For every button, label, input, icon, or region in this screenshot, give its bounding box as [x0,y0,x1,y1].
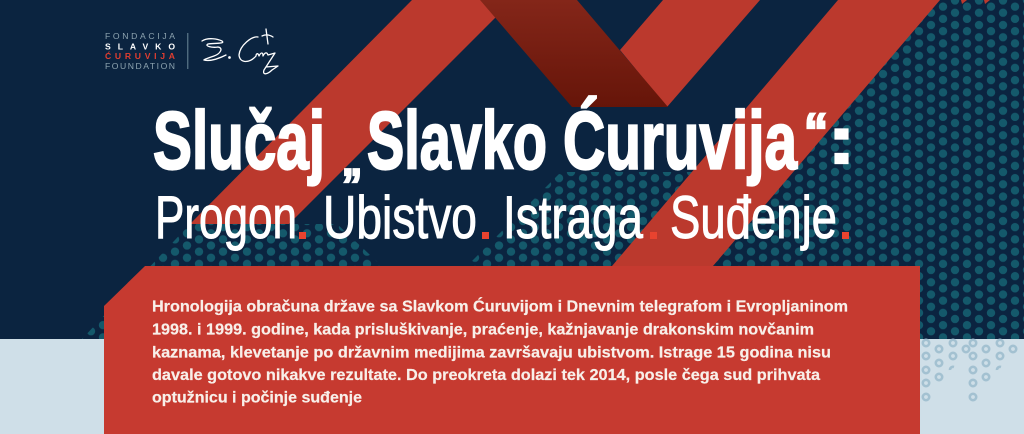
logo: foundation name: ĆURUVIJA [105,50,175,61]
subtitle: Istraga [503,184,643,251]
subtitle: Ubistvo [323,184,477,251]
subtitle: Suđenje [670,184,837,251]
title [153,96,855,186]
ring pattern on light band [923,340,1016,400]
description text: 1998. i 1999. godine, kada prisluškivanje, praćenje, kažnjavanje drakonskim novčanim [152,322,814,338]
dot pattern: centre [465,172,695,300]
title: „ [342,134,362,185]
title: Ćuruvija [563,96,798,186]
description text: optužnicu i počinje suđenje [152,390,362,407]
subtitle: Progon [155,184,297,251]
red stripe: middle [620,0,760,107]
logo: foundation name: SLAVKO [105,41,175,51]
description text: kaznama, klevetanje po državnim medijima završavaju ubistvom. Istrage 15 godina nisu [152,344,831,362]
small red marks top right [961,0,990,4]
light band [0,339,1024,434]
description text: Hronologija obračuna države sa Slavkom Ćuruvijom i Dnevnim telegrafom i Evropljaninom [152,296,848,316]
title: Slavko [367,96,547,186]
dark red stripe [480,0,668,107]
logo: foundation name: FOUNDATION [105,61,175,71]
logo: foundation name: FONDACIJA [105,31,175,41]
title: Slučaj [153,96,325,186]
logo divider [187,33,188,69]
dot pattern: left [82,224,384,339]
title: : [828,103,855,177]
dot pattern: right [700,0,1024,340]
title: “ [804,104,828,160]
red stripe: left [190,0,513,224]
subtitle [155,184,849,251]
logo: foundation name [105,31,175,71]
red stripe: large right [612,0,940,266]
description text: davale gotovo nikakve rezultate. Do preokreta dolazi tek 2014, posle čega sud prihvata [152,367,820,384]
navy background [0,0,1024,340]
logo: signature [202,29,278,74]
description text [152,296,848,407]
panel: description box [104,266,920,434]
